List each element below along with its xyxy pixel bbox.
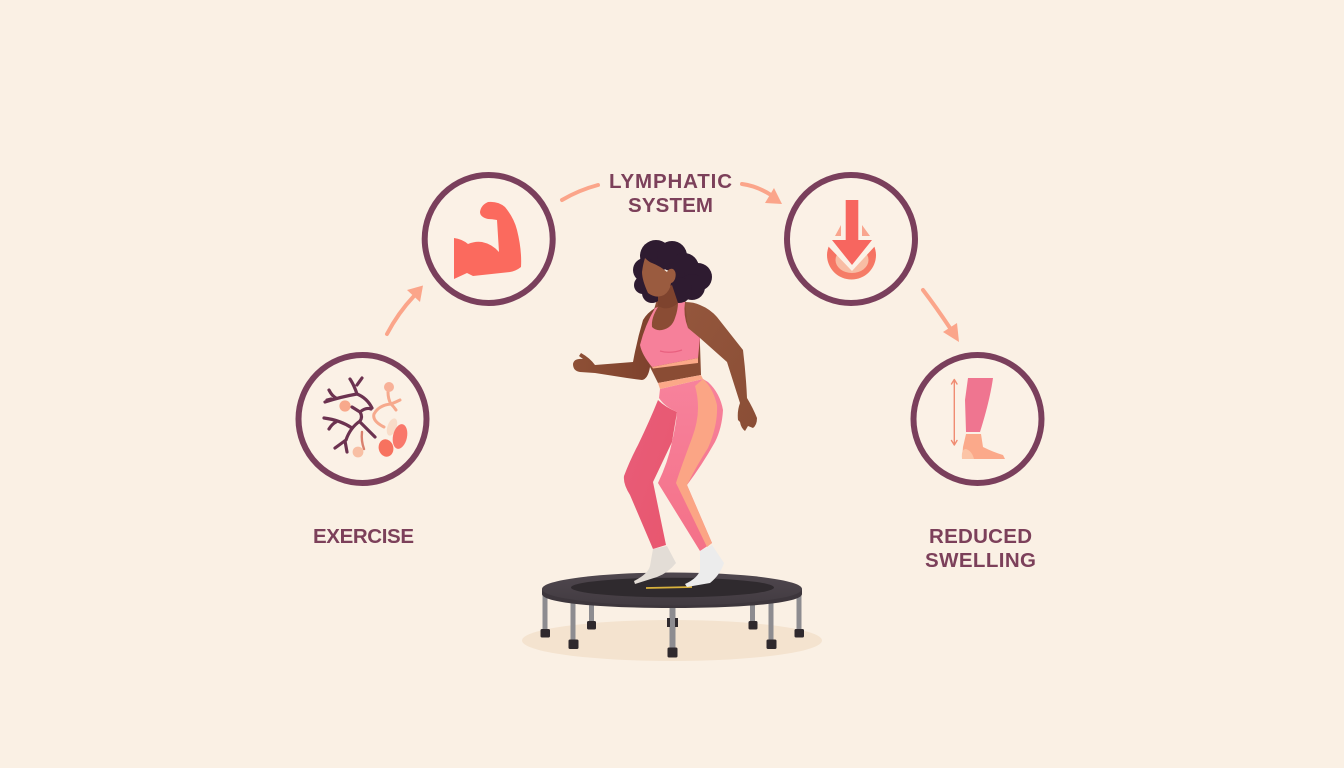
front leg and hip: [658, 379, 723, 551]
waistband: [658, 375, 703, 389]
icon circle: flexed arm muscle: [425, 175, 553, 303]
top hem band: [652, 358, 698, 368]
floor shadow: [522, 620, 822, 661]
icon circle: lower leg and foot: [914, 355, 1042, 483]
mini trampoline: [540, 572, 804, 658]
label: reduced swelling: [925, 525, 1036, 572]
left sock: [634, 546, 676, 584]
hair: [633, 240, 712, 303]
label: lymphatic system: SYSTEM: [628, 194, 713, 217]
arrow: lymphatic system to drainage: [742, 184, 782, 204]
neck: [658, 285, 678, 308]
sports top: [640, 302, 700, 367]
right sock: [685, 545, 724, 587]
icon circle: lymphatic vessels: [298, 355, 426, 483]
left arm: [573, 308, 662, 380]
label: reduced swelling: SWELLING: [925, 549, 1036, 572]
leg stripe: [676, 379, 717, 547]
face: [642, 258, 676, 297]
woman bouncing: [573, 240, 757, 587]
label: reduced swelling: REDUCED: [929, 525, 1032, 548]
arrow: muscle to lymphatic system: [562, 185, 598, 200]
label: lymphatic system: LYMPHATIC: [609, 170, 732, 193]
right arm: [685, 302, 757, 431]
label: lymphatic system: [609, 170, 732, 217]
label: exercise: EXERCISE: [313, 525, 414, 548]
icon circle: downward drainage arrow: [787, 175, 915, 303]
arrow: exercise to muscle: [387, 286, 423, 334]
rear leg: [624, 400, 677, 549]
arrow: drainage to reduced swelling: [923, 290, 959, 342]
torso skin: [645, 296, 701, 383]
